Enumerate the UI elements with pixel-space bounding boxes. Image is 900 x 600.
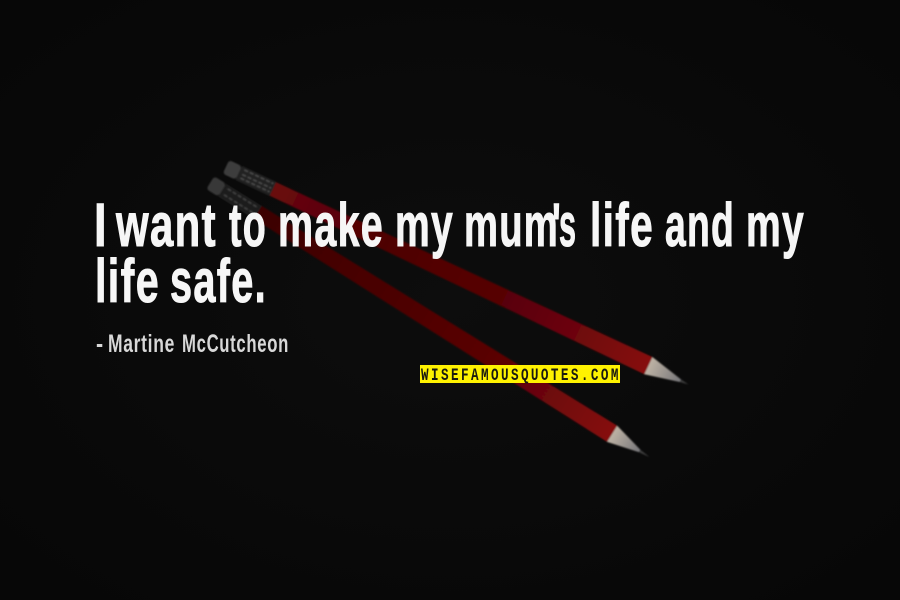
pencil: lower <box>205 175 655 465</box>
quote line 1: my <box>395 191 454 259</box>
quote line 2: life <box>95 247 160 315</box>
quote text <box>94 191 805 315</box>
quote line 2: safe. <box>170 247 267 315</box>
quote line 1: s <box>559 191 577 259</box>
author attribution: Martine <box>108 330 175 358</box>
quote line 1: mum <box>464 191 559 259</box>
quote line 1: life <box>590 191 654 259</box>
watermark badge <box>420 365 621 386</box>
quote line 1: ' <box>552 191 562 259</box>
quote line 1: I <box>94 191 108 259</box>
watermark text: WISEFAMOUSQUOTES.COM <box>421 365 621 386</box>
quote line 1: and <box>665 191 735 259</box>
pencil: upper <box>222 158 692 393</box>
quote line 1: my <box>746 191 805 259</box>
quote line 1: make <box>278 191 384 259</box>
author attribution: - <box>96 330 104 358</box>
author attribution: McCutcheon <box>182 330 289 358</box>
quote line 1: want <box>115 191 217 259</box>
quote line 1: to <box>229 191 267 259</box>
